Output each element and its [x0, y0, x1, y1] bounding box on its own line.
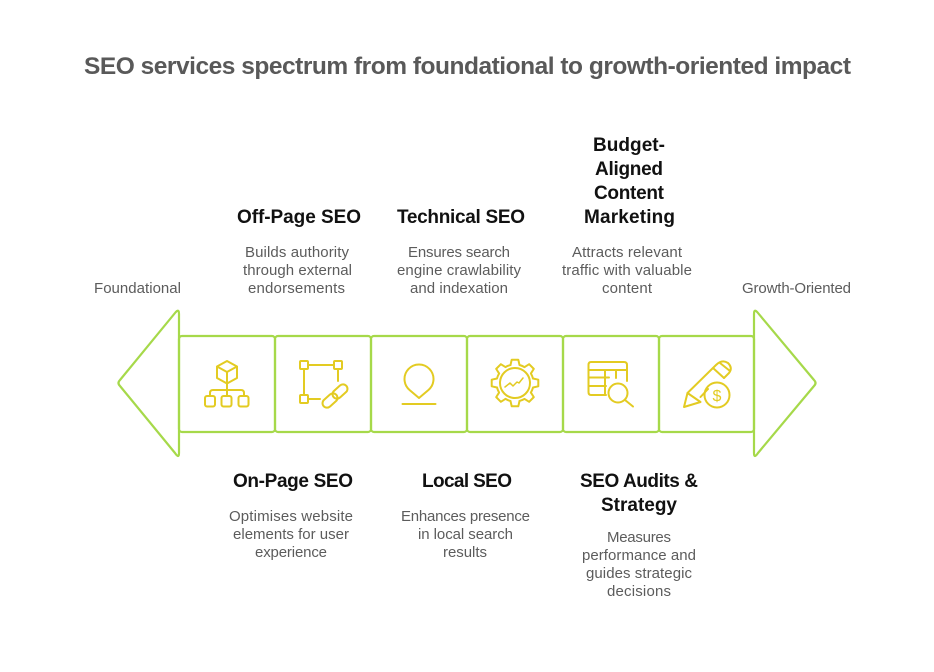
block: Off-Page SEO: Builds authority	[245, 244, 350, 261]
block: Technical SEO: engine crawlability	[397, 262, 522, 279]
block: SEO Audits & Strategy: performance and	[582, 547, 696, 564]
block: Technical SEO: Ensures search	[408, 244, 510, 261]
block: SEO Audits & Strategy	[580, 471, 698, 600]
block: Budget-Aligned Content Marketing: Aligned	[595, 159, 663, 180]
block: Local SEO: in local search	[418, 526, 513, 543]
segment 6	[659, 336, 754, 432]
block: SEO Audits & Strategy: decisions	[607, 583, 671, 600]
block: Budget-Aligned Content Marketing: Content	[594, 183, 665, 204]
icon: link building shape	[300, 361, 349, 410]
block: SEO Audits & Strategy: SEO Audits &	[580, 471, 698, 492]
block: On-Page SEO: Optimises website	[229, 508, 353, 525]
icon: pencil with dollar coin: $	[713, 388, 722, 405]
block: Budget-Aligned Content Marketing: Attracts relevant	[572, 244, 683, 261]
block: On-Page SEO	[229, 471, 353, 561]
segment 2	[275, 336, 371, 432]
label: Growth-Oriented: Growth-Oriented	[742, 280, 851, 297]
segment 5	[563, 336, 659, 432]
icon: site hierarchy with cube	[205, 361, 248, 406]
label: Foundational: Foundational	[94, 280, 181, 297]
block: Budget-Aligned Content Marketing: Budget-	[593, 135, 665, 156]
block: Technical SEO: Technical SEO	[397, 207, 525, 228]
icon: location pin	[402, 364, 436, 404]
segment 1	[179, 336, 275, 432]
block: Technical SEO	[397, 207, 525, 297]
block: Budget-Aligned Content Marketing: Marketing	[584, 207, 675, 228]
block: Off-Page SEO: Off-Page SEO	[237, 207, 361, 228]
title: SEO services spectrum from foundational to growth-oriented impact	[84, 53, 851, 80]
block: Off-Page SEO: endorsements	[248, 280, 345, 297]
segment 3	[371, 336, 467, 432]
block: On-Page SEO: elements for user	[233, 526, 349, 543]
block: On-Page SEO: experience	[255, 544, 327, 561]
block: SEO Audits & Strategy: Measures	[607, 529, 671, 546]
block: Local SEO: Local SEO	[422, 471, 512, 492]
arrow: left head	[118, 311, 179, 456]
icon: pencil with dollar coin	[684, 361, 731, 408]
block: Budget-Aligned Content Marketing	[562, 135, 692, 297]
icon: gear with growth chart	[492, 360, 538, 406]
arrow: right head	[754, 311, 816, 456]
block: Budget-Aligned Content Marketing: content	[602, 280, 653, 297]
block: Budget-Aligned Content Marketing: traffic with valuable	[562, 262, 692, 279]
block: On-Page SEO: On-Page SEO	[233, 471, 353, 492]
block: Technical SEO: and indexation	[410, 280, 508, 297]
segment 4	[467, 336, 563, 432]
icon: table with magnifier	[588, 362, 633, 406]
block: Off-Page SEO	[237, 207, 361, 297]
block: Local SEO: Enhances presence	[401, 508, 530, 525]
block: Local SEO: results	[443, 544, 487, 561]
block: Off-Page SEO: through external	[243, 262, 352, 279]
block: SEO Audits & Strategy: guides strategic	[586, 565, 692, 582]
panel: spectrum arrow	[118, 311, 816, 456]
block: SEO Audits & Strategy: Strategy	[601, 495, 677, 516]
block: Local SEO	[401, 471, 530, 561]
